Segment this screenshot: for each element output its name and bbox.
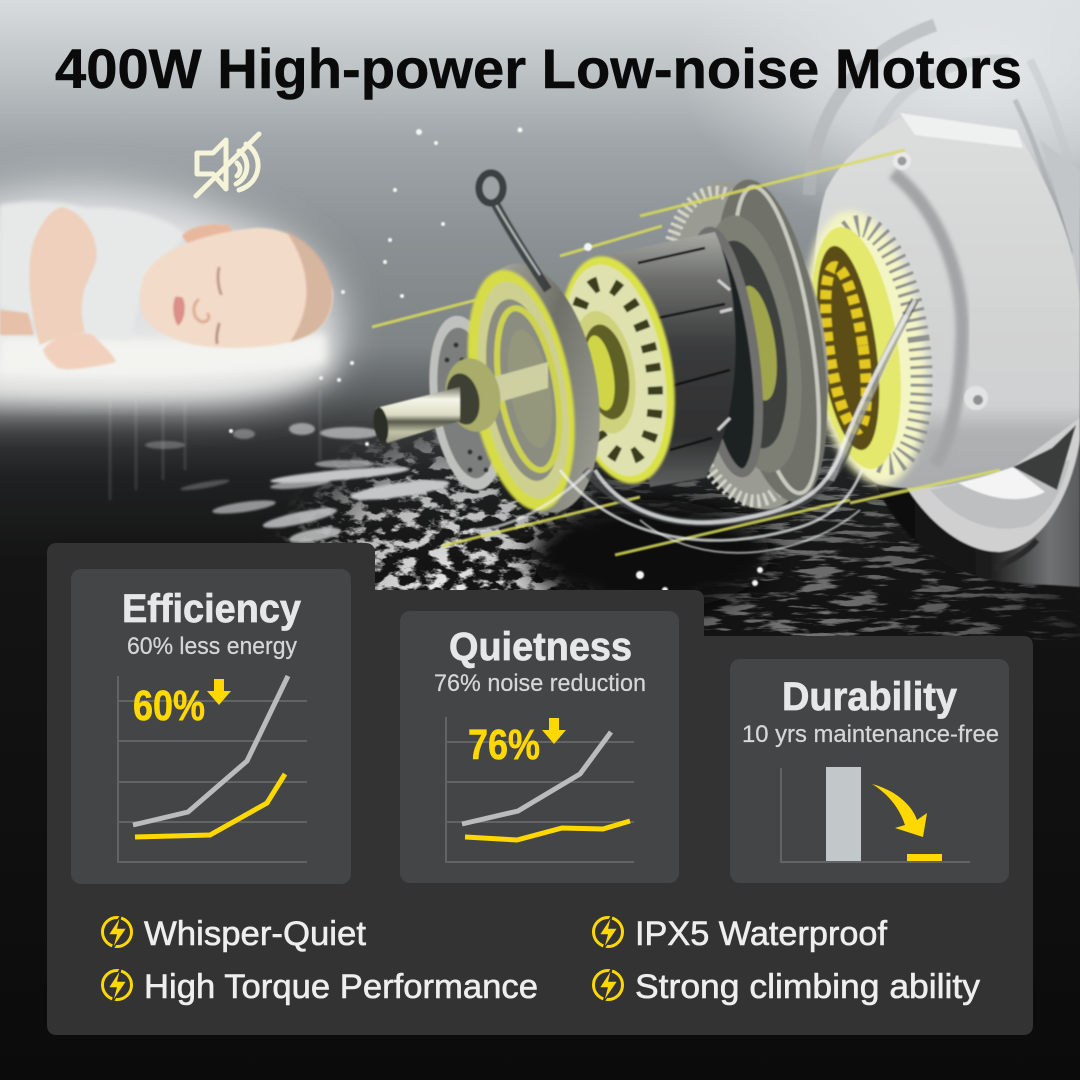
- ear: [182, 224, 232, 243]
- line chart: quietness: [446, 717, 634, 862]
- soft white cloud: [0, 186, 342, 405]
- line chart: efficiency: [118, 676, 307, 862]
- vented silver disc: [640, 169, 850, 521]
- onesie: [0, 202, 186, 340]
- heading: efficiency: Efficiency: [122, 587, 302, 631]
- water surface with ripples: [144, 422, 1080, 640]
- front yellow bearing ring: [450, 253, 618, 523]
- heading: quietness: Quietness: [449, 625, 632, 669]
- panel: durability card: [730, 659, 1009, 883]
- hair shading: [285, 230, 332, 342]
- motor housing body: [813, 115, 1080, 488]
- callout: 60% down: 60%: [133, 682, 205, 730]
- panel: features backdrop: [47, 543, 1033, 1035]
- text: 76% noise reduction: 76% noise reduction: [434, 670, 646, 697]
- heading: durability: Durability: [782, 675, 958, 719]
- text: 10 yrs maintenance-free: 10 yrs maintenance-free: [742, 721, 999, 748]
- housing opening with glowing coil: [789, 203, 943, 493]
- baby figure: [0, 207, 333, 369]
- yellow speed lines: [372, 150, 1000, 555]
- icon: muted speaker: [196, 134, 259, 196]
- bar chart: durability: [781, 767, 970, 862]
- end plate behind shaft: [419, 311, 515, 495]
- face details: [174, 268, 221, 343]
- far arm: [0, 310, 34, 335]
- feature: IPX5 waterproof: IPX5 Waterproof: [635, 915, 888, 953]
- shaft and bearing: [372, 353, 548, 444]
- water splashes and droplets: [229, 128, 915, 593]
- arrow: curved down to small bar: [872, 784, 927, 837]
- text: 60% less energy: 60% less energy: [127, 633, 297, 660]
- mattress: [0, 334, 325, 377]
- motor exploded view: [229, 25, 1080, 593]
- near arm: [29, 207, 97, 345]
- panel: efficiency card: [71, 569, 351, 884]
- feature: strong climbing ability: Strong climbing ability: [635, 968, 980, 1006]
- feature: whisper-quiet: Whisper-Quiet: [144, 915, 367, 953]
- yellow rotor ring: [543, 247, 691, 493]
- dark stator core: [605, 227, 771, 487]
- tire and wheel disc: [876, 400, 1080, 587]
- sleeping baby scene: [0, 134, 342, 405]
- rear housing rings: [809, 25, 1080, 270]
- dark water hump under motor: [530, 500, 770, 610]
- title: 400W High-power Low-noise Motors: [55, 37, 1022, 100]
- ripple streaks: [145, 423, 450, 545]
- feature: high torque performance: High Torque Performance: [144, 968, 538, 1006]
- head: [140, 228, 333, 348]
- callout: 76% down: 76%: [468, 721, 540, 769]
- hand: [43, 333, 116, 369]
- panel: quietness card: [400, 611, 679, 883]
